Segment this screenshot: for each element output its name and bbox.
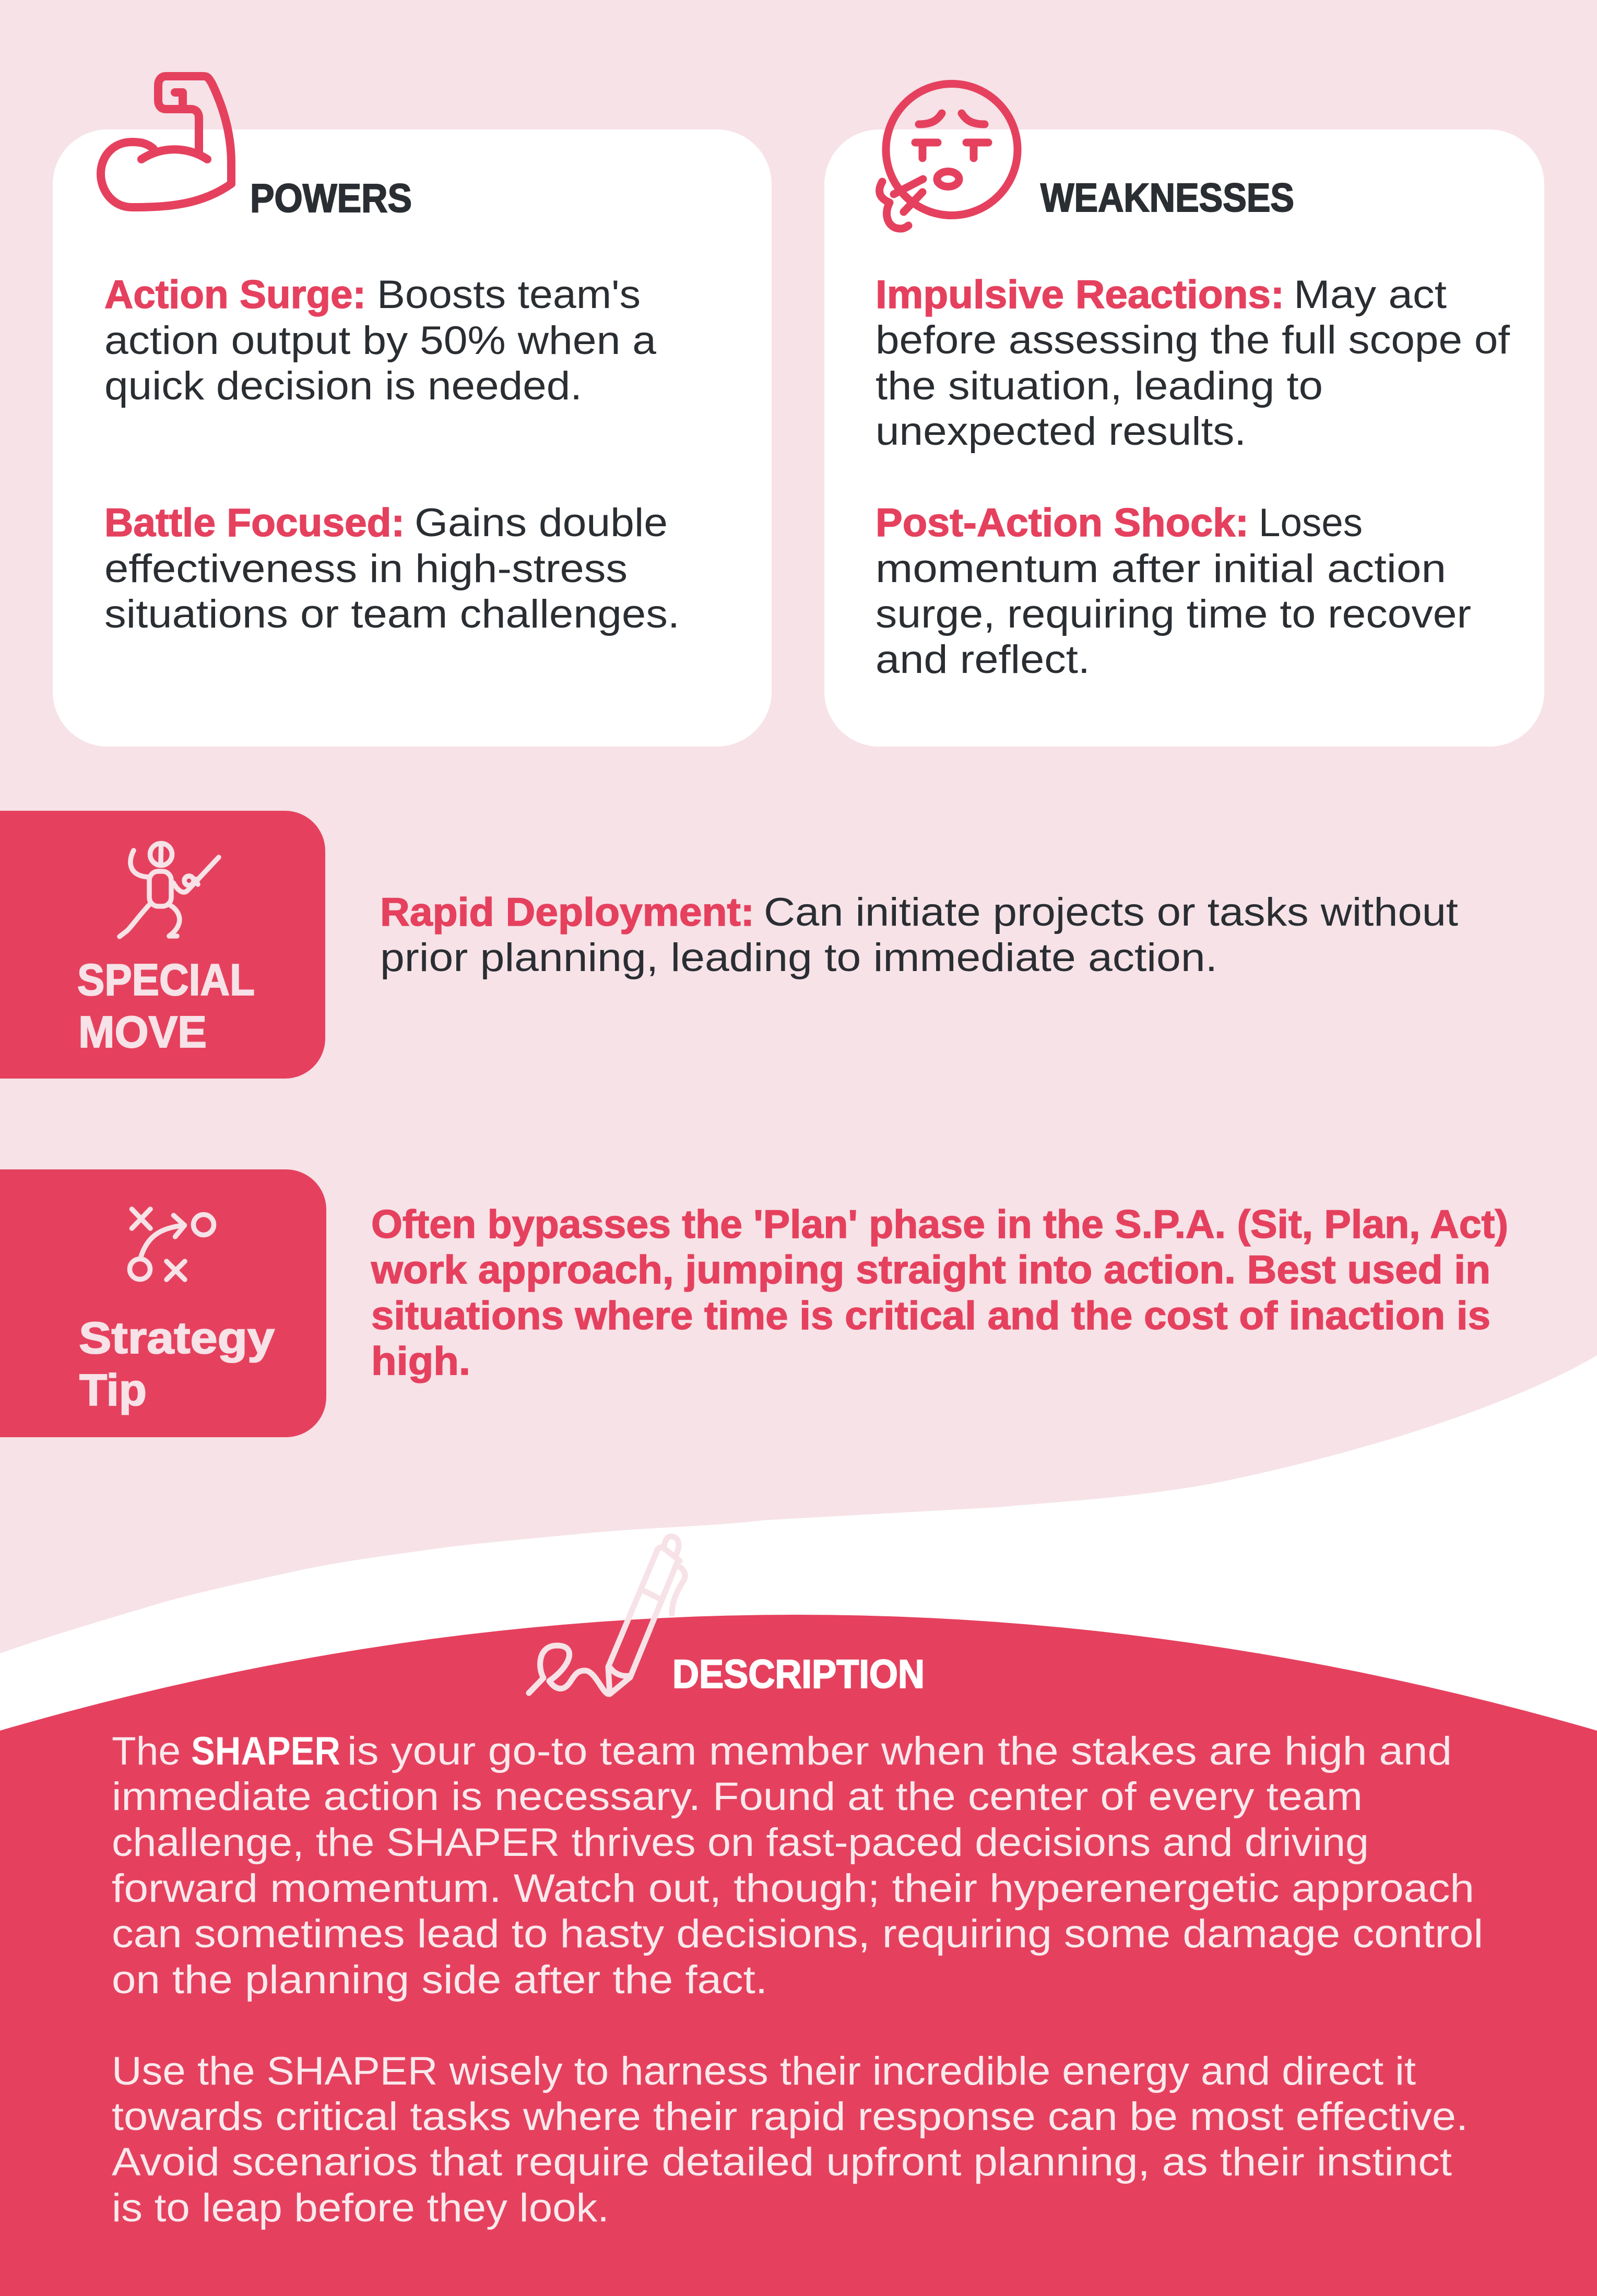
text block: description paragraph one: forward momentum. Watch out, though; their hyperenergetic approach xyxy=(112,1866,1474,1911)
text block: description paragraph one: SHAPER xyxy=(191,1729,340,1773)
heading: strategy tip xyxy=(79,1313,275,1415)
text block: battle focused: effectiveness in high-stress xyxy=(104,547,628,591)
text block: strategy tip body: situations where time is critical and the cost of inaction is xyxy=(371,1294,1490,1338)
text block: battle focused xyxy=(104,501,680,636)
heading: strategy tip: Tip xyxy=(79,1366,147,1415)
icon: flexed arm xyxy=(101,76,231,207)
heading: special move: SPECIAL xyxy=(77,955,255,1005)
text block: battle focused: Gains double xyxy=(415,501,668,545)
text block: post-action shock: Post-Action Shock: xyxy=(876,501,1249,545)
text block: description paragraph two: towards critical tasks where their rapid response can be most effective. xyxy=(112,2094,1468,2139)
text block: description paragraph two xyxy=(112,2049,1468,2230)
text block: rapid deployment: prior planning, leading to immediate action. xyxy=(380,936,1217,980)
text block: description paragraph one: challenge, the SHAPER thrives on fast-paced decisions and driving xyxy=(112,1820,1369,1865)
text block: post-action shock: surge, requiring time to recover xyxy=(876,592,1471,636)
text block: description paragraph two: is to leap before they look. xyxy=(112,2186,609,2230)
text block: rapid deployment: Can initiate projects or tasks without xyxy=(764,890,1458,934)
text block: strategy tip body: high. xyxy=(371,1339,470,1383)
text block: impulsive reactions: unexpected results. xyxy=(876,409,1246,454)
text block: post-action shock: and reflect. xyxy=(876,637,1090,682)
background: pink wave area xyxy=(0,0,1597,1653)
text block: post-action shock: momentum after initial action xyxy=(876,547,1446,591)
text block: description paragraph one: immediate action is necessary. Found at the center of every team xyxy=(112,1774,1363,1819)
panel: powers xyxy=(53,76,772,747)
icon: play diagram xyxy=(129,1209,214,1280)
text block: action surge: Boosts team's xyxy=(377,273,641,317)
text block: description paragraph one: can sometimes lead to hasty decisions, requiring some damage control xyxy=(112,1912,1483,1956)
icon: sick face xyxy=(880,84,1018,229)
icon: pen with signature xyxy=(529,1536,685,1694)
panel: special move xyxy=(0,811,325,1079)
heading: strategy tip: Strategy xyxy=(79,1313,275,1363)
text block: description paragraph one: The xyxy=(112,1729,181,1773)
text block: impulsive reactions xyxy=(876,273,1510,454)
text block: strategy tip body xyxy=(371,1202,1508,1383)
text block: action surge: Action Surge: xyxy=(104,273,366,317)
panel: strategy tip xyxy=(0,1169,326,1437)
text block: strategy tip body: work approach, jumping straight into action. Best used in xyxy=(371,1248,1490,1292)
text block: action surge: action output by 50% when a xyxy=(104,318,657,363)
heading: special move: MOVE xyxy=(78,1008,207,1057)
panel: weaknesses xyxy=(824,84,1544,747)
icon: fencer xyxy=(120,844,219,937)
heading: special move xyxy=(77,955,255,1057)
text block: strategy tip body: Often bypasses the 'Plan' phase in the S.P.A. (Sit, Plan, Act) xyxy=(371,1202,1508,1247)
heading: description: DESCRIPTION xyxy=(672,1652,925,1697)
text block: description paragraph two: Use the SHAPER wisely to harness their incredible energy and direct it xyxy=(112,2049,1416,2093)
text block: battle focused: Battle Focused: xyxy=(104,501,405,545)
heading: powers: POWERS xyxy=(250,176,412,221)
text block: description paragraph two: Avoid scenarios that require detailed upfront planning, as their instinct xyxy=(112,2140,1452,2184)
text block: impulsive reactions: Impulsive Reactions: xyxy=(876,273,1284,317)
text block: rapid deployment xyxy=(380,890,1458,980)
text block: post-action shock xyxy=(876,501,1471,682)
text block: rapid deployment: Rapid Deployment: xyxy=(380,890,754,934)
text block: post-action shock: Loses xyxy=(1259,501,1363,545)
text block: action surge xyxy=(104,273,657,408)
text block: description paragraph one: is your go-to team member when the stakes are high and xyxy=(347,1729,1452,1773)
background: red description area xyxy=(0,1615,1597,2296)
text block: impulsive reactions: the situation, leading to xyxy=(876,364,1323,408)
text block: action surge: quick decision is needed. xyxy=(104,364,582,408)
text block: description paragraph one xyxy=(112,1729,1483,2002)
text block: impulsive reactions: before assessing the full scope of xyxy=(876,318,1510,362)
heading: weaknesses: WEAKNESSES xyxy=(1040,175,1294,220)
text block: battle focused: situations or team challenges. xyxy=(104,592,680,636)
text block: impulsive reactions: May act xyxy=(1294,273,1447,317)
text block: description paragraph one: on the planning side after the fact. xyxy=(112,1958,767,2002)
